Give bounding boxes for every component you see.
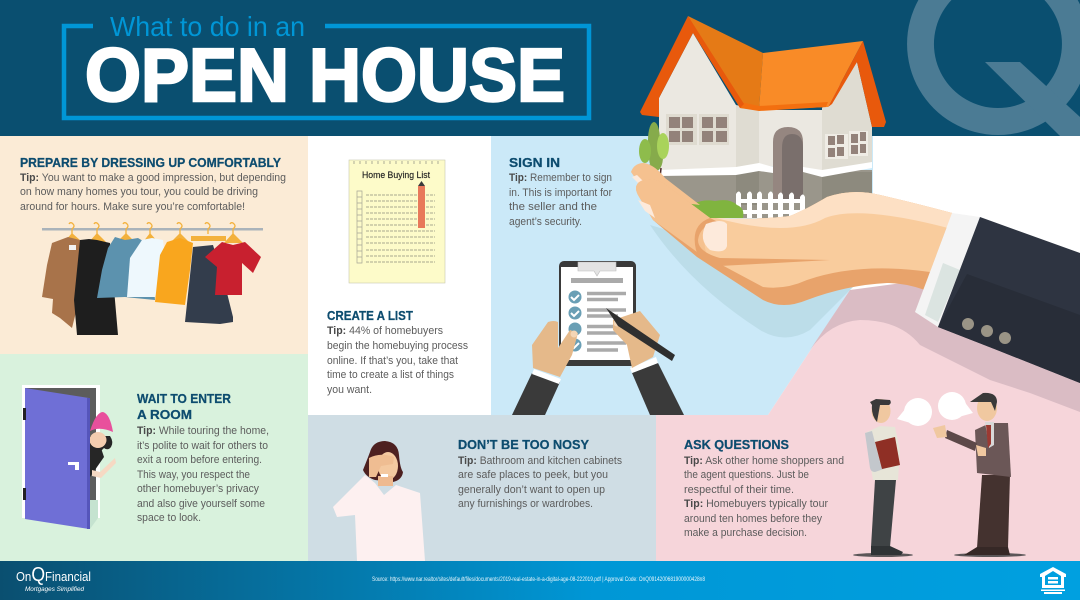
footer logo: On Q Financial: OnQFinancial [16,564,91,586]
logo watermark: large Q [907,0,1080,136]
bush [684,198,743,218]
two men talking illustration [853,392,1026,557]
open hand illustration [631,163,952,305]
tip text: create a list: time to create a list of things [327,369,454,381]
panel: sign in background [491,136,873,415]
tip text: ask questions [684,455,844,539]
door with woman illustration [22,385,116,529]
tip text: wait to enter: and also give yourself some [137,498,265,510]
tip text: wait to enter: space to look. [137,512,201,524]
panel: header background [0,0,1080,136]
fence [736,192,805,218]
tip text: create a list: you want. [327,384,372,396]
shirt cuff [915,213,980,327]
tip text: ask questions: make a purchase decision. [684,527,807,539]
tip text: dressing [20,172,286,213]
tip text: create a list: Tip: 44% of homebuyers [327,325,443,337]
speech bubbles [897,392,973,426]
tip text: sign in: agent’s security. [509,216,582,228]
panel: white background right [308,136,1080,415]
footer bar [0,561,1080,600]
notepad illustration: Home Buying List [362,170,430,181]
tip text: sign in: in. This is important for [509,187,612,199]
tip text: sign in [509,172,612,228]
tip text: ask questions: respectful of their time. [684,484,794,496]
title: what to do in an: What to do in an [110,11,305,42]
tip text: sign in: the seller and the [509,201,597,213]
tip text: nosy: any furnishings or wardrobes. [458,498,593,510]
panel content: nosy [333,437,622,561]
heading: create a list: CREATE A LIST [327,308,413,323]
heading: prepare by dressing up comfortably: PREPARE BY DRESSING UP COMFORTABLY [20,155,281,170]
sleeve buttons [962,318,1011,344]
notepad illustration [349,160,445,283]
panel content: ask questions [684,392,1026,557]
tip text: sign in: Tip: Remember to sign [509,172,612,184]
heading: sign in: SIGN IN [509,155,560,170]
panel content: create a list [327,160,468,396]
door [773,127,803,200]
heading: wait to enter a room: A ROOM [137,407,192,422]
heading: wait to enter a room [137,391,232,422]
tip text: wait to enter: Tip: While touring the home, [137,425,269,437]
clipboard with hands illustration [512,261,684,415]
tip text: create a list [327,325,468,396]
panel: ask questions background [656,285,1080,561]
panel: peach dressing background [0,136,308,354]
hand shadow on blue panel [650,225,855,338]
panel content: sign in [509,155,684,415]
equal housing lender icon [1040,567,1066,594]
tip text: nosy: Tip: Bathroom and kitchen cabinets [458,455,622,467]
sleeve shadow on pink panel [810,280,1080,412]
tip text: ask questions: Tip: Homebuyers typically tour [684,498,828,510]
tip text: ask questions: around ten homes before they [684,513,822,525]
panel: nosy background [308,415,656,561]
tip text: nosy [458,455,622,510]
tip text: nosy: are safe places to peek, but you [458,469,608,481]
tree [639,122,669,178]
clothes rack illustration [42,223,263,335]
tip text: create a list: online. If that’s you, take that [327,355,458,367]
heading: ask questions: ASK QUESTIONS [684,437,789,452]
roof [688,16,763,110]
tip text: dressing: on how many homes you tour, you could be driving [20,186,258,198]
title frame [64,26,589,118]
tip text: wait to enter: exit a room before entering. [137,454,262,466]
tip text: dressing: Tip: You want to make a good impression, but depending [20,172,286,184]
woman covering eyes illustration [333,441,425,561]
windows [666,114,868,159]
tip text: create a list: begin the homebuying process [327,340,468,352]
panel content: wait to enter [22,385,269,529]
footer logo: On Q Financial: Mortgages Simplified [25,587,85,593]
tip text: wait to enter: it’s polite to wait for others to [137,440,268,452]
tip text: wait to enter: This way, you respect the [137,469,250,481]
house illustration [639,16,886,218]
tip text: ask questions: Tip: Ask other home shoppers and [684,455,844,467]
tip text: wait to enter [137,425,269,524]
tip text: dressing: around for hours. Make sure you’re comfortable! [20,201,245,213]
panel content: dressing [20,155,286,335]
title: open house: OPEN HOUSE [85,33,565,117]
heading: wait to enter a room: WAIT TO ENTER [137,391,232,406]
panel: green wait background [0,354,308,561]
tip text: wait to enter: other homebuyer’s privacy [137,483,259,495]
heading: don't be too nosy: DON’T BE TOO NOSY [458,437,589,452]
footer source text: Source: https://www.nar.realtor/sites/default/files/documents/2019-real-estate-in-a-digital-age-08-222019.pdf | Approval Code: OnQ0914200681900000428n8 [372,577,706,583]
suit sleeve [938,217,1080,383]
tip text: ask questions: the agent questions. Just be [684,469,809,481]
tip text: nosy: generally don’t want to open up [458,484,605,496]
